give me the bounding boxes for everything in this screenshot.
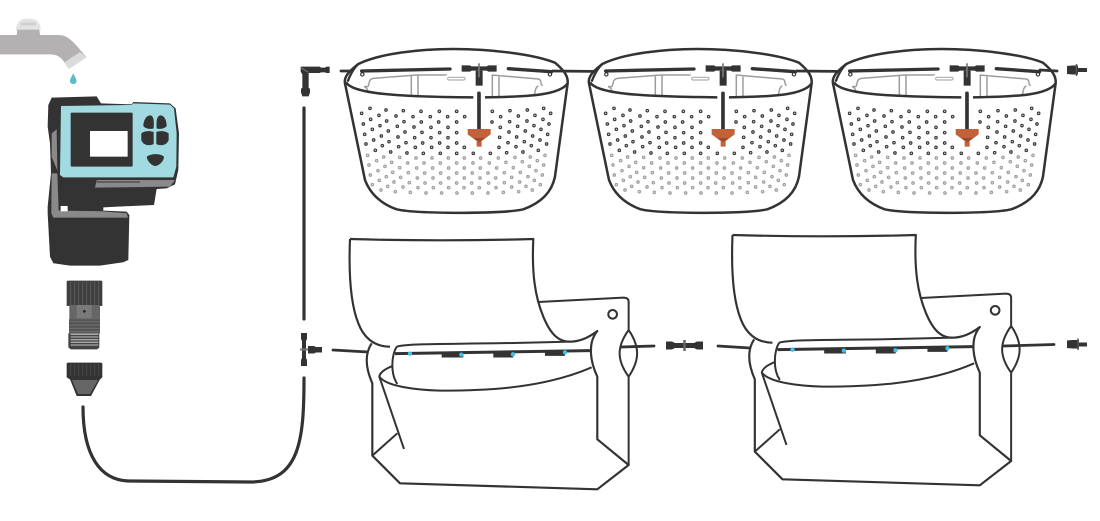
- tube basket 2 to 3: [796, 70, 849, 73]
- basket 3: [833, 49, 1056, 213]
- device screen: [71, 113, 133, 167]
- fabric bag 1: [350, 239, 637, 489]
- curved supply hose: [83, 378, 304, 482]
- basket 1: [345, 49, 568, 213]
- device buttons: [141, 115, 169, 166]
- tube exit bag 1: [621, 346, 654, 347]
- vertical supply tube: [302, 108, 306, 319]
- tube end after basket 3: [1040, 70, 1057, 71]
- hose connector nut: [67, 363, 102, 396]
- end plug bottom: [1067, 338, 1087, 350]
- tube exit bag 2: [1003, 344, 1054, 346]
- icon: faucet: [0, 19, 87, 69]
- tube to second bag: [718, 346, 750, 348]
- hose adapter: [67, 281, 102, 349]
- tube to first basket: [341, 70, 360, 72]
- fabric bag 2: [732, 235, 1020, 485]
- basket 2: [589, 49, 812, 213]
- inline connector: [666, 340, 703, 351]
- tee fitting: [300, 333, 322, 366]
- end plug top: [1067, 64, 1087, 76]
- tube to first bag: [333, 350, 368, 352]
- timer controller device: [48, 96, 179, 266]
- icon: water drop: [70, 73, 76, 84]
- tube basket 1 to 2: [552, 70, 605, 73]
- elbow fitting: [301, 67, 330, 96]
